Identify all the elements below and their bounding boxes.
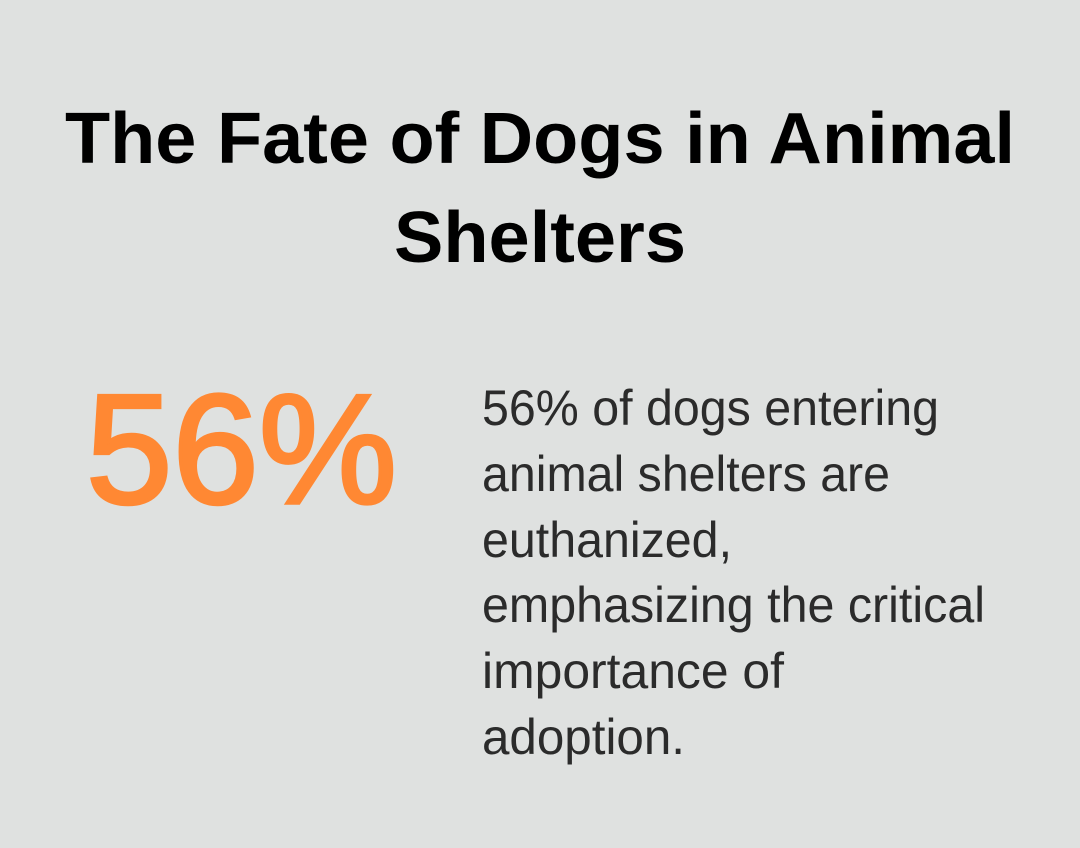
description text: emphasizing the critical <box>482 577 985 633</box>
description text: euthanized, <box>482 512 732 568</box>
description text: 56% of dogs entering <box>482 380 939 436</box>
big statistic: 56%: 56% <box>86 363 397 537</box>
title <box>65 99 1015 278</box>
description text: animal shelters are <box>482 446 890 502</box>
title: Shelters <box>394 198 686 278</box>
title: The Fate of Dogs in Animal <box>65 99 1015 179</box>
description text: adoption. <box>482 709 685 765</box>
description text: importance of <box>482 643 784 699</box>
description text <box>482 380 985 765</box>
